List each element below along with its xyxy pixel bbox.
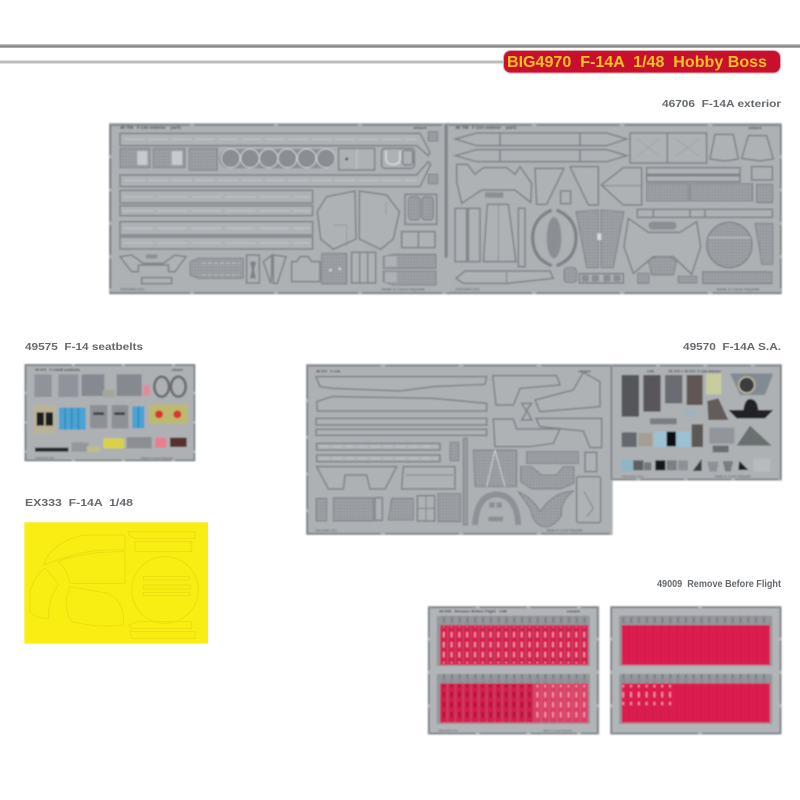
label: 49575 seatbelts: 49575 F-14 seatbelts xyxy=(25,341,143,353)
photo-etch sheet: 49575 seatbelts: ©EDUARD 2011 xyxy=(35,456,55,460)
canopy panels xyxy=(317,191,356,249)
interior colour panel: ©EDUARD 2011 xyxy=(622,475,644,479)
photo-etch sheet: 49570 exterior-side panel: ©EDUARD 2011 xyxy=(315,529,337,533)
blue belts xyxy=(59,408,86,430)
lower panels xyxy=(317,467,397,489)
photo-etch sheet: 46706 exterior part 2: 46 706 F-14A exterior part2 xyxy=(455,125,517,130)
red tags upper row xyxy=(440,625,588,665)
label: 49570 S.A.: 49570 F-14A S.A. xyxy=(683,341,781,353)
photo-etch sheet: 49575 seatbelts xyxy=(24,364,195,461)
photo-etch sheet: 46706 exterior part 1: 46 706 F-14A exterior part1 xyxy=(120,125,182,130)
grille row xyxy=(316,498,327,521)
flap panels xyxy=(455,208,467,262)
photo-etch sheet: 46706 exterior part 1 xyxy=(109,123,449,294)
red tags lower row xyxy=(622,683,770,723)
grey belts xyxy=(90,405,107,428)
photo-etch sheet: Remove Before Flight left: Made in Czech Republic xyxy=(543,728,573,732)
header rule: upper line xyxy=(0,44,800,48)
upper long strip xyxy=(120,133,430,156)
photo-etch sheet: 46706 exterior part 2: ©EDUARD 2011 xyxy=(455,287,480,291)
square access panels xyxy=(630,133,707,163)
oval ring with discs xyxy=(533,210,576,266)
photo-etch sheet: Remove Before Flight right xyxy=(610,606,782,735)
photo-etch sheet: Remove Before Flight left: eduard xyxy=(567,608,581,613)
photo-etch sheet: 46706 exterior part 2: Made in Czech Republic xyxy=(717,286,760,291)
photo-etch sheet: 49575 seatbelts: eduard xyxy=(172,368,183,372)
photo-etch sheet: Remove Before Flight left xyxy=(428,606,599,735)
round grille xyxy=(707,222,752,268)
label: 46706 exterior: 46706 F-14A exterior xyxy=(662,98,781,110)
title badge: BIG4970 F-14A 1/48 Hobby Boss xyxy=(507,54,767,71)
angular panels xyxy=(493,376,560,405)
header rule: lower line xyxy=(0,60,505,64)
photo-etch sheet: 46706 exterior part 1: eduard xyxy=(413,125,427,130)
red tags lower row xyxy=(440,683,588,723)
grille panels xyxy=(120,148,150,168)
large bracket part xyxy=(457,164,532,203)
bottom row parts xyxy=(456,271,553,283)
interior colour panel: 1/48 xyxy=(647,369,654,373)
photo-etch sheet: 49570 exterior-side panel: Made in Czech Republic xyxy=(547,529,583,533)
photo-etch sheet: Remove Before Flight left: 49 009 Remove Before Flight 1/48 xyxy=(439,608,508,613)
interior colour panel: FE 570 + 49 570 F-14A interior xyxy=(668,369,722,373)
bottom row parts xyxy=(120,255,186,272)
photo-etch sheet: 49575 seatbelts: 49 575 F-14A/B seatbelts xyxy=(35,368,80,372)
photo-etch sheet: Remove Before Flight left: ©EDUARD 2011 xyxy=(438,728,458,732)
photo-etch sheet: 49570 exterior-side panel: 48 570 F-14A xyxy=(316,369,341,373)
label: EX333 mask: EX333 F-14A 1/48 xyxy=(25,497,133,509)
interior colour panel: Made in Czech Republic xyxy=(715,475,751,479)
photo-etch sheet: 46706 exterior part 1: Made in Czech Republic xyxy=(382,286,425,291)
photo-etch sheet: 46706 exterior part 1: ©EDUARD 2011 xyxy=(120,287,145,291)
photo-etch sheet: 46706 exterior part 2: eduard xyxy=(748,125,762,130)
beige and red harness panel xyxy=(149,404,188,424)
lower long strip xyxy=(120,162,431,187)
bottom row buckles xyxy=(35,448,68,452)
triangular panels xyxy=(535,168,564,204)
strips and mesh xyxy=(647,168,740,174)
two long tapered fairings xyxy=(455,133,627,146)
photo-etch sheet: 46706 exterior part 2 xyxy=(445,123,782,294)
small hatch pair xyxy=(405,194,437,224)
long fuselage strips xyxy=(120,190,313,203)
yellow canopy mask sheet xyxy=(24,522,208,644)
photo-etch sheet: 49575 seatbelts: Made in Czech Republic xyxy=(141,456,174,460)
dog-bone panel xyxy=(624,218,701,274)
photo-etch sheet: 49570 exterior-side panel xyxy=(306,364,782,535)
photo-etch sheet: 49570 exterior-side panel: eduard xyxy=(578,369,591,373)
grey harness parts row xyxy=(34,374,52,397)
small vertical parts xyxy=(450,442,459,461)
red tags upper row xyxy=(622,625,770,665)
six circular covers xyxy=(219,149,336,168)
interior colour panel xyxy=(622,369,773,479)
etched mesh doors xyxy=(576,210,598,268)
arched parts xyxy=(475,494,518,525)
long wing strips xyxy=(316,377,487,391)
label: 49009 Remove Before Flight: 49009 Remove Before Flight xyxy=(657,578,781,590)
black buckle panel xyxy=(33,405,55,433)
